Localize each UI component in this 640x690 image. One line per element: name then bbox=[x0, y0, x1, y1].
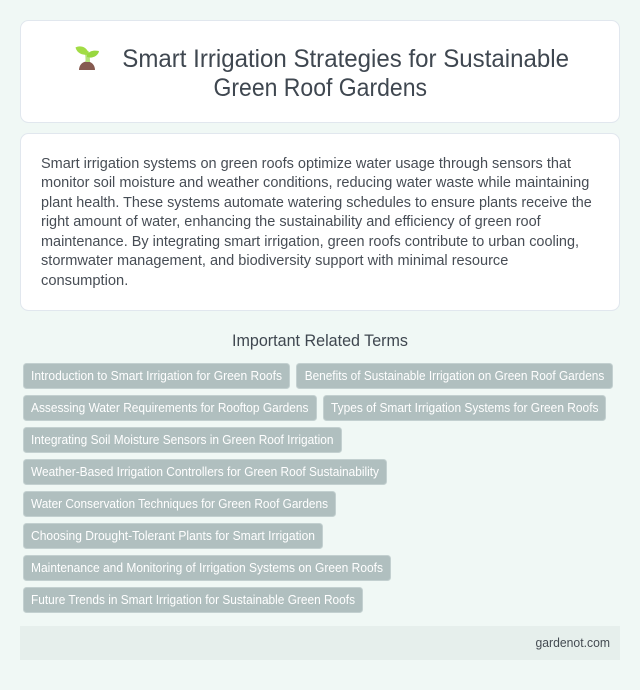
tag: water conservation bbox=[24, 492, 336, 516]
footer text: gardenot.com bbox=[536, 635, 610, 650]
text block: description: monitor soil moisture and weather conditions, reducing water waste while maintaining bbox=[41, 175, 589, 191]
text block: description: Smart irrigation systems on green roofs optimize water usage through sensors that bbox=[41, 156, 571, 172]
tag: drought-tolerant: Choosing Drought-Tolerant Plants for Smart Irrigation bbox=[31, 528, 315, 543]
tag: water conservation: Water Conservation Techniques for Green Roof Gardens bbox=[31, 496, 328, 511]
tag: benefits: Benefits of Sustainable Irrigation on Green Roof Gardens bbox=[305, 368, 604, 383]
tag: introduction: Introduction to Smart Irrigation for Green Roofs bbox=[31, 368, 282, 383]
title: Smart Irrigation Strategies for Sustainable bbox=[122, 45, 569, 73]
panel: title header bbox=[20, 20, 620, 122]
tag: soil moisture sensors bbox=[24, 428, 342, 452]
tag: future trends: Future Trends in Smart Irrigation for Sustainable Green Roofs bbox=[31, 592, 355, 607]
text block: description bbox=[41, 156, 592, 289]
tag: types bbox=[324, 396, 606, 420]
title bbox=[122, 45, 569, 102]
tag list: related terms bbox=[24, 364, 612, 612]
tag: weather-based bbox=[24, 460, 386, 484]
tag: benefits bbox=[296, 364, 612, 388]
tag: weather-based: Weather-Based Irrigation Controllers for Green Roof Sustainability bbox=[31, 464, 380, 479]
heading: related terms: Important Related Terms bbox=[232, 332, 408, 350]
text block: description: plant health. These systems automate watering schedules to ensure plants receive the bbox=[41, 195, 592, 211]
tag: introduction bbox=[24, 364, 290, 388]
text block: description: maintenance. By integrating smart irrigation, green roofs contribute to urban cooling, bbox=[41, 234, 579, 250]
panel: description bbox=[20, 134, 620, 310]
icon: seedling bbox=[76, 46, 99, 70]
tag: maintenance: Maintenance and Monitoring of Irrigation Systems on Green Roofs bbox=[31, 560, 383, 575]
text block: description: stormwater management, and biodiversity support with minimal resource bbox=[41, 253, 508, 269]
title: Green Roof Gardens bbox=[214, 74, 427, 102]
text block: description: consumption. bbox=[41, 273, 128, 289]
text block: description: right amount of water, enhancing the sustainability and efficiency of green roof bbox=[41, 214, 542, 230]
tag: soil moisture sensors: Integrating Soil Moisture Sensors in Green Roof Irrigation bbox=[31, 432, 334, 447]
tag: types: Types of Smart Irrigation Systems for Green Roofs bbox=[331, 400, 598, 415]
footer bbox=[20, 626, 620, 660]
tag: maintenance bbox=[24, 556, 390, 580]
tag: assessing water bbox=[24, 396, 316, 420]
tag: assessing water: Assessing Water Requirements for Rooftop Gardens bbox=[31, 400, 308, 415]
tag: future trends bbox=[24, 588, 362, 612]
tag: drought-tolerant bbox=[24, 524, 322, 548]
